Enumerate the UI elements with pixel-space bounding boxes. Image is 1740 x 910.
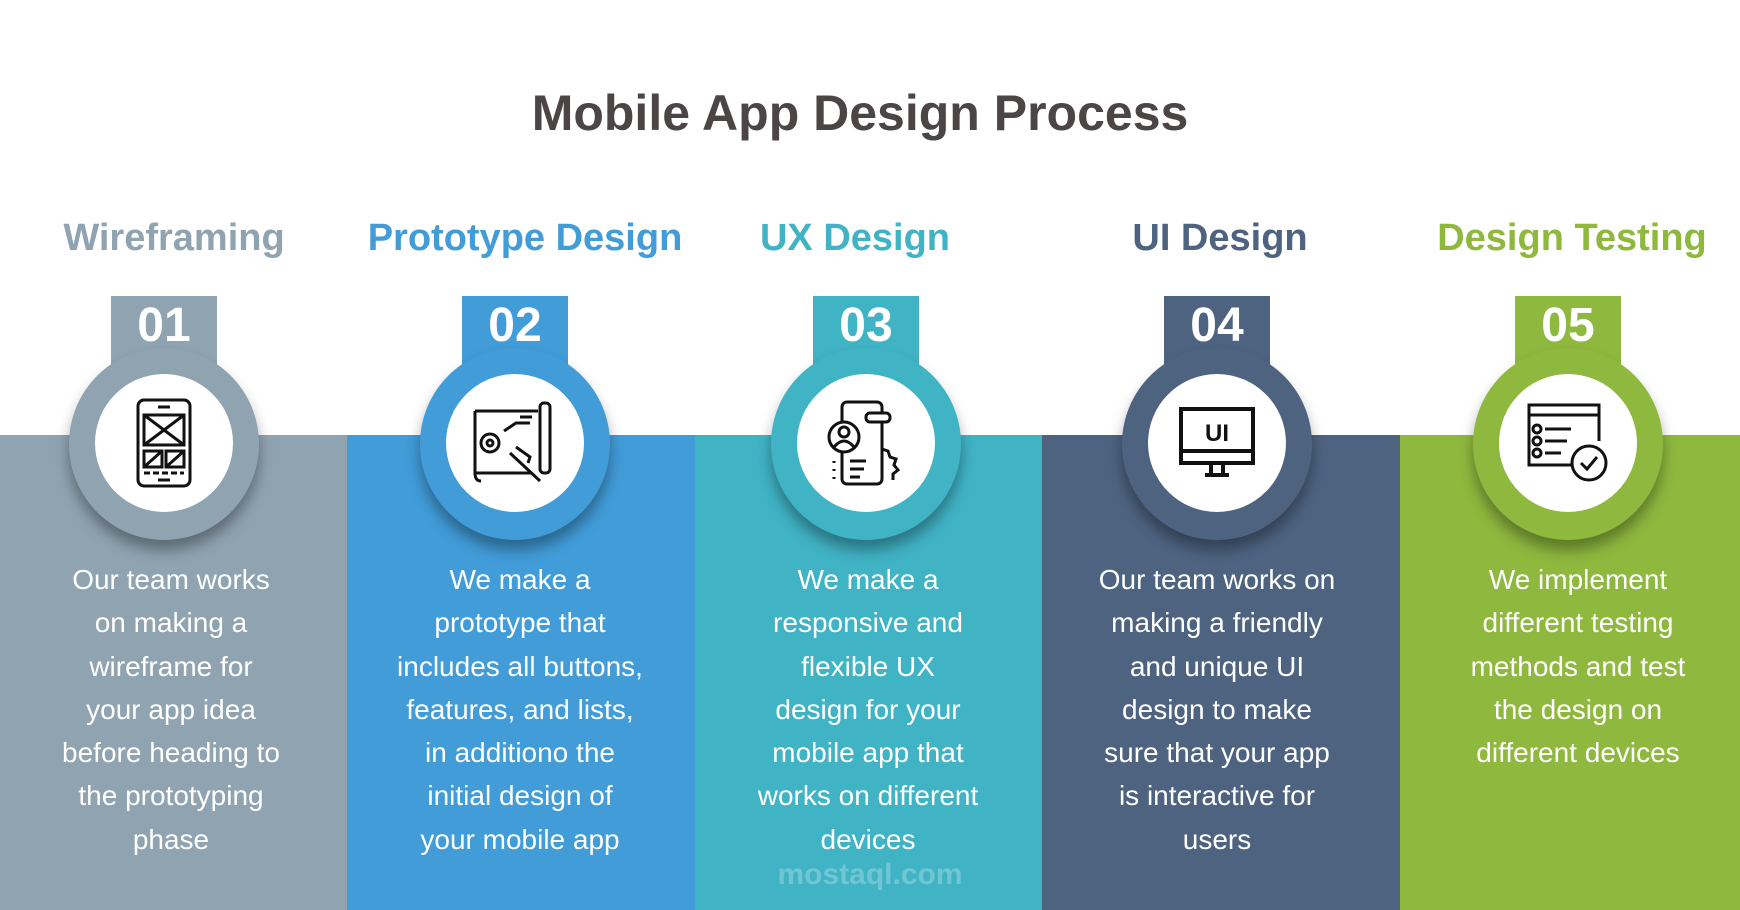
number tab 04: [1164, 296, 1270, 376]
icon: UI monitor: UI: [1205, 420, 1229, 447]
text: ui: [1099, 564, 1335, 855]
number tab 01: [111, 296, 217, 376]
text: testing: [1471, 564, 1686, 768]
text: prototype: [397, 564, 643, 855]
text: prototype: prototype that: [434, 607, 606, 638]
text: ux: works on different: [758, 780, 978, 811]
panel: testing background: [1400, 435, 1740, 910]
icon: ux phone user: [797, 374, 935, 512]
text: testing: methods and test: [1471, 651, 1685, 682]
heading: Design Testing: Design Testing: [1437, 217, 1707, 259]
text: testing: different testing: [1483, 607, 1673, 638]
text: prototype: We make a: [449, 564, 591, 595]
panel: ux background: [695, 435, 1042, 910]
heading: UI Design: UI Design: [1132, 217, 1308, 259]
number tab 02: 02: [488, 299, 542, 352]
number tab 01: 01: [137, 299, 191, 352]
text: prototype: features, and lists,: [406, 694, 634, 725]
text: ui: sure that your app: [1104, 737, 1330, 768]
text: ui: design to make: [1122, 694, 1312, 725]
number tab 02: [462, 296, 568, 376]
step 05 badge: [1466, 296, 1670, 558]
text: ui: and unique UI: [1130, 651, 1304, 682]
step 03 badge: [764, 296, 968, 558]
ring 02: [420, 348, 610, 540]
text: wireframing: the prototyping: [78, 780, 264, 811]
panel: wireframing background: [0, 435, 347, 910]
step 04 badge: [1115, 296, 1319, 556]
text: prototype: in additiono the: [425, 737, 615, 768]
panel: prototype background: [347, 435, 695, 910]
text: ux: mobile app that: [772, 737, 964, 768]
watermark: mostaql.com: [777, 858, 963, 891]
text: ux: devices: [821, 824, 915, 855]
number tab 04: 04: [1190, 299, 1244, 352]
text: wireframing: [62, 564, 280, 855]
text: wireframing: your app idea: [86, 694, 256, 725]
text: ux: [758, 564, 978, 855]
text: ui: users: [1183, 824, 1251, 855]
number tab 05: [1515, 296, 1621, 376]
heading: Wireframing: Wireframing: [63, 217, 285, 259]
icon: prototype drawing: [446, 374, 584, 512]
ring 01: [69, 348, 259, 540]
number tab 05: 05: [1541, 299, 1595, 352]
text: wireframing: phase: [133, 824, 209, 855]
text: prototype: your mobile app: [420, 824, 620, 855]
title: Mobile App Design Process: [532, 85, 1188, 141]
heading: UX Design: UX Design: [760, 217, 950, 259]
text: prototype: includes all buttons,: [397, 651, 643, 682]
step 02 badge: [412, 296, 618, 558]
text: wireframing: Our team works: [72, 564, 270, 595]
text: testing: We implement: [1489, 564, 1667, 595]
text: ui: making a friendly: [1111, 607, 1323, 638]
text: prototype: initial design of: [427, 780, 613, 811]
number tab 03: 03: [839, 299, 893, 352]
ring 05: [1473, 348, 1663, 540]
text: ux: We make a: [797, 564, 939, 595]
text: testing: different devices: [1476, 737, 1680, 768]
text: wireframing: wireframe for: [89, 651, 253, 682]
panel: ui background: [1042, 435, 1400, 910]
ring 03: [771, 348, 961, 540]
text: ux: responsive and: [773, 607, 963, 638]
text: testing: the design on: [1494, 694, 1662, 725]
number tab 03: [813, 296, 919, 376]
ring 04: [1122, 348, 1312, 540]
text: ui: is interactive for: [1119, 780, 1315, 811]
text: wireframing: before heading to: [62, 737, 280, 768]
step 01 badge: [62, 296, 266, 558]
icon: testing checklist: [1499, 374, 1637, 512]
icon: wireframe phone: [95, 374, 233, 512]
text: ux: design for your: [775, 694, 961, 725]
text: wireframing: on making a: [95, 607, 247, 638]
heading: Prototype Design: Prototype Design: [368, 217, 682, 259]
icon: UI monitor: [1148, 374, 1286, 512]
text: ui: Our team works on: [1099, 564, 1335, 595]
text: ux: flexible UX: [801, 651, 935, 682]
